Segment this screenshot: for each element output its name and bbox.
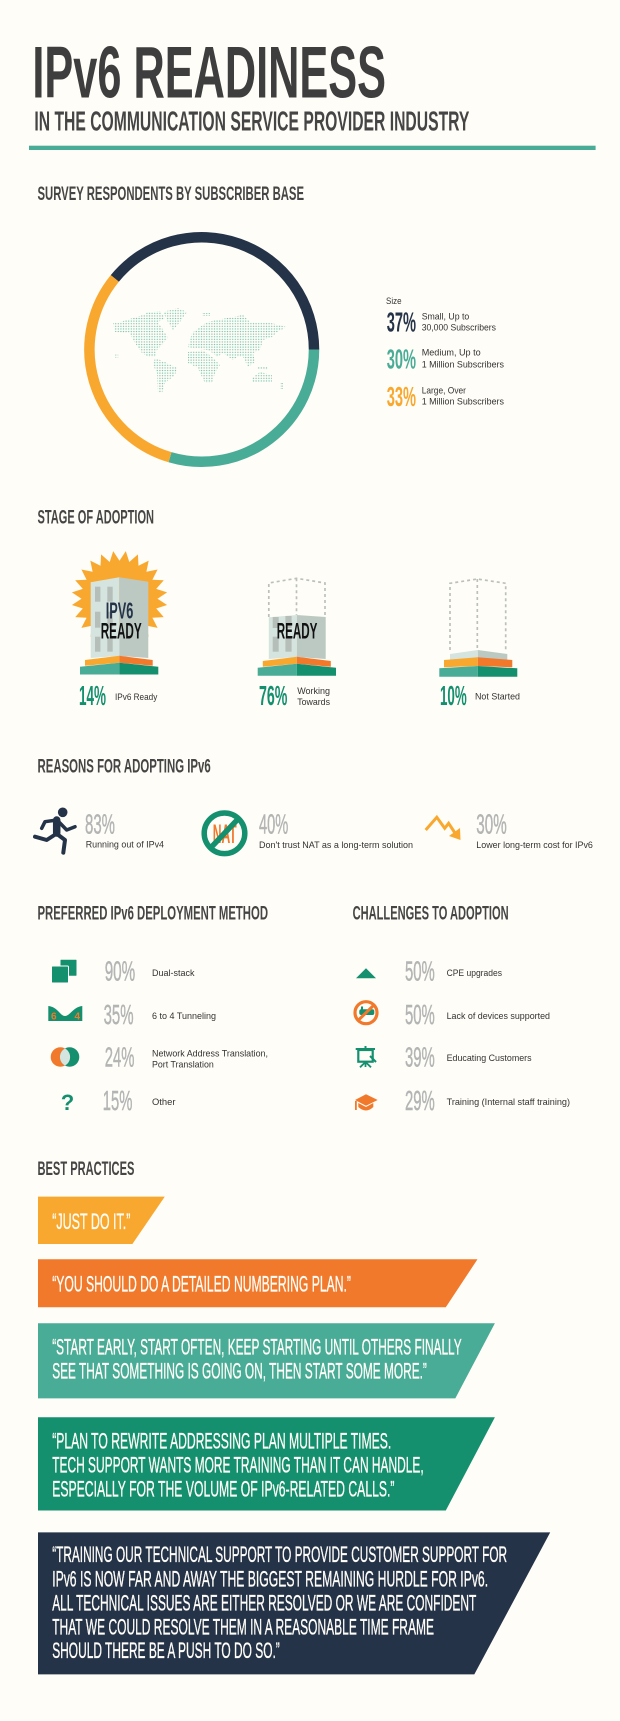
row: network address translation: 24% — [105, 1042, 134, 1073]
banner: start early — [38, 1323, 495, 1398]
row: dual-stack — [52, 956, 195, 987]
ring chart — [89, 237, 314, 462]
banner: rewrite addressing plan — [38, 1417, 495, 1510]
legend: small: 37% — [387, 307, 416, 338]
stat: 76%: Towards — [297, 697, 330, 708]
legend: large: Large, Over — [422, 385, 466, 396]
legend: medium: 1 Million Subscribers — [422, 359, 504, 370]
stat: 83%: Running out of IPv4 — [86, 840, 164, 851]
heading: reasons: REASONS FOR ADOPTING IPv6 — [38, 755, 211, 777]
building: working towards — [258, 578, 336, 676]
stat: 10% — [440, 680, 520, 711]
row: tunneling: 6 to 4 Tunneling — [152, 1011, 216, 1022]
stat: 83%: 83% — [85, 808, 115, 839]
banner: training technical support — [38, 1532, 550, 1674]
row: network address translation: Network Address Translation, — [152, 1048, 268, 1059]
row: lack of devices — [355, 999, 550, 1030]
stat: 10%: 10% — [440, 680, 467, 711]
row: other: Other — [152, 1097, 176, 1108]
icon: no NAT: NAT — [213, 819, 237, 849]
panel: survey respondents — [38, 183, 504, 462]
heading: survey respondents: SURVEY RESPONDENTS BY SUBSCRIBER BASE — [38, 183, 304, 205]
main title: IPv6 READINESS — [32, 30, 386, 113]
legend: small — [387, 307, 496, 338]
stat: 30%: Lower long-term cost for IPv6 — [476, 840, 593, 851]
banner: just do it — [38, 1197, 165, 1244]
banner: just do it: “JUST DO IT.” — [52, 1209, 130, 1234]
stat: 10%: Not Started — [475, 692, 520, 702]
legend: small: 30,000 Subscribers — [422, 322, 496, 333]
legend: medium: 30% — [387, 344, 416, 374]
stat: 30% — [476, 808, 593, 851]
panel: best practices — [38, 1158, 550, 1674]
legend: large: 33% — [387, 381, 416, 412]
sunburst — [72, 551, 167, 646]
row: lack of devices: Lack of devices supported — [447, 1011, 550, 1022]
panel: stage of adoption — [38, 506, 520, 711]
icon: presentation board — [356, 1046, 376, 1067]
banner: numbering plan: “YOU SHOULD DO A DETAILED NUMBERING PLAN.” — [52, 1271, 351, 1296]
icon: no NAT — [204, 813, 245, 854]
icon: graduation cap — [355, 1094, 378, 1110]
row: dual-stack: 90% — [105, 956, 135, 987]
row: lack of devices: 50% — [405, 999, 435, 1030]
heading: best practices: BEST PRACTICES — [38, 1158, 134, 1180]
panel: challenges to adoption — [353, 902, 570, 1116]
icon: declining cost arrow — [426, 817, 460, 840]
row: CPE upgrades: 50% — [405, 956, 435, 987]
legend: large: 1 Million Subscribers — [422, 396, 504, 407]
panel: reasons for adopting — [35, 755, 593, 854]
legend: small: Small, Up to — [422, 311, 469, 322]
legend: medium: Medium, Up to — [422, 347, 481, 358]
stat: 40%: Don't trust NAT as a long-term solution — [259, 840, 413, 851]
row: educating customers: Educating Customers — [447, 1053, 532, 1064]
stat: 40% — [259, 808, 413, 851]
legend: medium — [387, 344, 504, 374]
building: IPv6 ready: IPV6 — [106, 597, 133, 623]
stat: 30%: 30% — [476, 808, 507, 839]
building: IPv6 ready — [72, 551, 167, 674]
row: tunneling — [48, 999, 216, 1030]
row: other: 15% — [103, 1085, 132, 1116]
banner: training technical support: SHOULD THERE BE A PUSH TO DO SO.” — [52, 1638, 280, 1663]
panel: preferred deployment method — [38, 902, 268, 1116]
icon: triangle — [356, 968, 376, 978]
icon: tunnel: 6 — [51, 1012, 57, 1022]
icon: tunnel — [48, 1006, 82, 1022]
banner: numbering plan — [38, 1259, 478, 1307]
row: CPE upgrades: CPE upgrades — [447, 968, 502, 979]
heading: deployment method: PREFERRED IPv6 DEPLOYMENT METHOD — [38, 902, 268, 924]
row: network address translation: Port Translation — [152, 1060, 214, 1071]
row: tunneling: 35% — [104, 999, 134, 1030]
row: CPE upgrades — [356, 956, 502, 987]
building: working towards: READY — [277, 618, 318, 643]
icon: question mark: ? — [61, 1090, 74, 1115]
legend: large — [387, 381, 504, 412]
icon: overlapping circles — [51, 1047, 79, 1067]
heading: stage of adoption: STAGE OF ADOPTION — [38, 506, 154, 528]
row: educating customers: 39% — [405, 1042, 435, 1073]
stat: 14%: IPv6 Ready — [115, 692, 158, 703]
heading: challenges: CHALLENGES TO ADOPTION — [353, 902, 509, 924]
row: network address translation — [50, 1047, 268, 1068]
row: dual-stack: Dual-stack — [152, 968, 195, 979]
dotted world map — [113, 308, 287, 393]
stat: 76%: Working — [297, 686, 330, 697]
row: training: 29% — [405, 1085, 435, 1116]
row: training: Training (Internal staff training) — [447, 1097, 570, 1108]
stat: 76%: 76% — [259, 680, 287, 711]
stat: 40%: 40% — [259, 808, 288, 839]
icon: running person — [35, 808, 75, 853]
stat: 14%: 14% — [79, 680, 106, 711]
icon: stacked squares — [52, 959, 77, 983]
title block — [32, 30, 469, 137]
building: not started — [439, 579, 517, 677]
legend title: Size — [386, 296, 402, 307]
legend — [386, 296, 504, 412]
stat: 83% — [85, 808, 164, 851]
building: IPv6 ready: READY — [101, 618, 142, 643]
row: other — [61, 1085, 176, 1116]
icon: tunnel: 4 — [74, 1012, 80, 1022]
row: educating customers — [356, 1042, 532, 1073]
row: training — [355, 1085, 570, 1116]
icon: crossed-out device — [355, 1002, 377, 1024]
